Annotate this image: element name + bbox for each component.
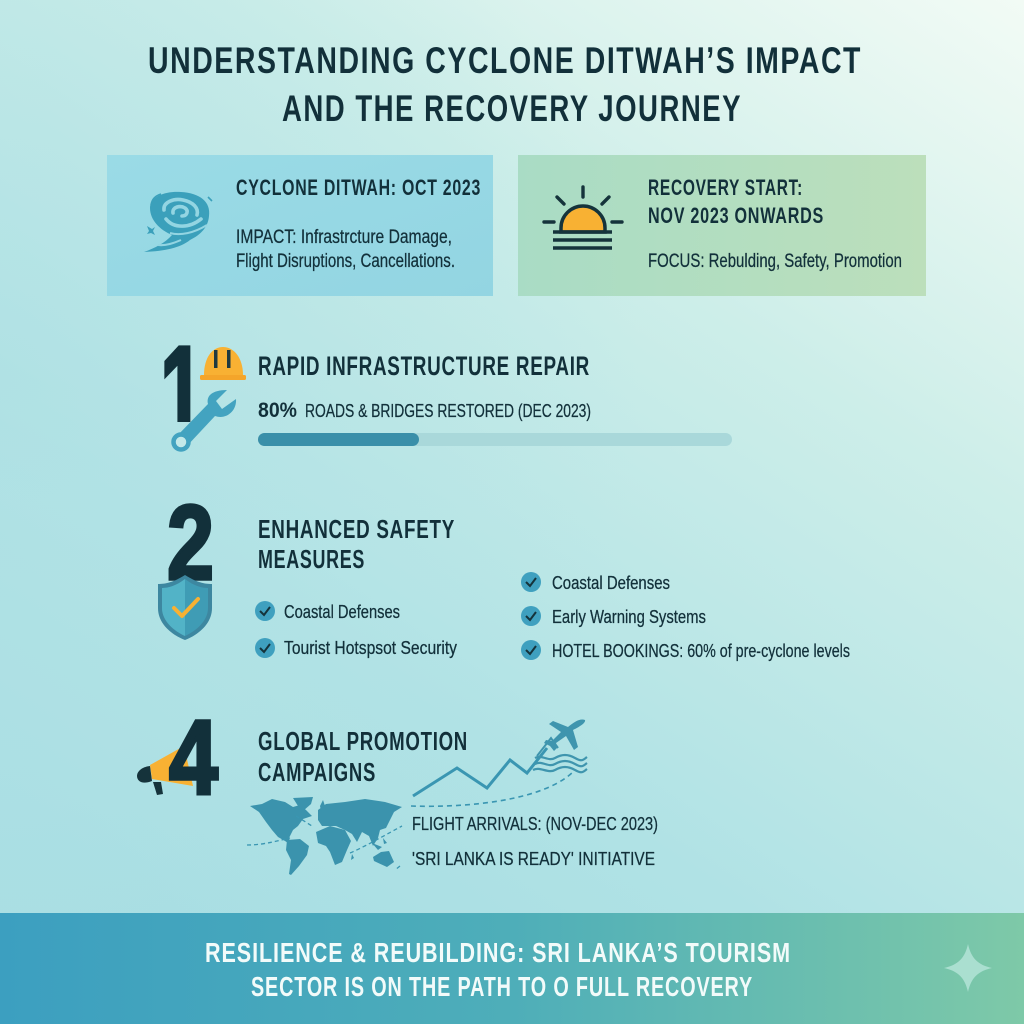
icon: sparkle [944, 944, 992, 992]
checklist right: Coastal Defenses [552, 573, 670, 593]
panel heading [648, 175, 824, 228]
impact text [236, 227, 455, 272]
dashed map routes [247, 816, 402, 870]
heading: RAPID INFRASTRUCTURE REPAIR [258, 351, 590, 381]
number 2: 2 [167, 484, 214, 602]
panel: recovery start [518, 155, 926, 296]
flight arrivals text: FLIGHT ARRIVALS: (NOV-DEC 2023) [412, 814, 658, 834]
checklist left: Coastal Defenses [284, 602, 400, 622]
title: AND THE RECOVERY JOURNEY [282, 88, 742, 129]
icon: sunrise [544, 187, 622, 248]
footer text: SECTOR IS ON THE PATH TO O FULL RECOVERY [251, 971, 753, 1002]
footer banner [0, 913, 1024, 1024]
panel heading: NOV 2023 ONWARDS [648, 203, 824, 228]
impact text: IMPACT: Infrastrcture Damage, [236, 227, 452, 248]
footer text [205, 937, 791, 1002]
heading: GLOBAL PROMOTION [258, 726, 468, 756]
icon: cyclone [144, 192, 212, 252]
icon: plane and waves [533, 719, 587, 772]
checklist left [255, 601, 457, 658]
heading: MEASURES [258, 544, 365, 574]
icon: hard hat [200, 347, 246, 380]
focus text: FOCUS: Rebulding, Safety, Promotion [648, 251, 902, 272]
icon: megaphone [137, 746, 193, 795]
icon: shield [158, 575, 212, 640]
icon: wrench [174, 390, 236, 450]
section 4: global promotion [137, 699, 658, 875]
line chart [413, 748, 547, 796]
heading: CAMPAIGNS [258, 757, 376, 787]
number 1: 1 [160, 319, 204, 466]
initiative text: 'SRI LANKA IS READY' INITIATIVE [412, 849, 655, 869]
stat text: ROADS & BRIDGES RESTORED (DEC 2023) [305, 401, 591, 421]
panel: cyclone impact [107, 155, 493, 296]
footer text: RESILIENCE & REUBILDING: SRI LANKA’S TOURISM [205, 937, 791, 968]
stat text [258, 399, 591, 422]
title [148, 40, 862, 129]
heading [258, 514, 455, 574]
stat text: 80% [258, 399, 297, 422]
impact text: Flight Disruptions, Cancellations. [236, 251, 455, 272]
checklist right: Early Warning Systems [552, 607, 706, 627]
checklist right: HOTEL BOOKINGS: 60% of pre-cyclone levels [552, 641, 850, 661]
panel heading: CYCLONE DITWAH: OCT 2023 [236, 175, 481, 200]
heading [258, 726, 468, 787]
checklist right [521, 572, 850, 661]
world map [250, 797, 402, 875]
number 4: 4 [169, 699, 218, 817]
checklist left: Tourist Hotspsot Security [284, 638, 457, 658]
panel heading: RECOVERY START: [648, 175, 803, 200]
dashed flight path [411, 771, 574, 806]
heading: ENHANCED SAFETY [258, 514, 455, 544]
progress bar [258, 433, 732, 446]
section 2: safety measures [158, 484, 850, 661]
section 1: infrastructure repair [164, 345, 732, 452]
